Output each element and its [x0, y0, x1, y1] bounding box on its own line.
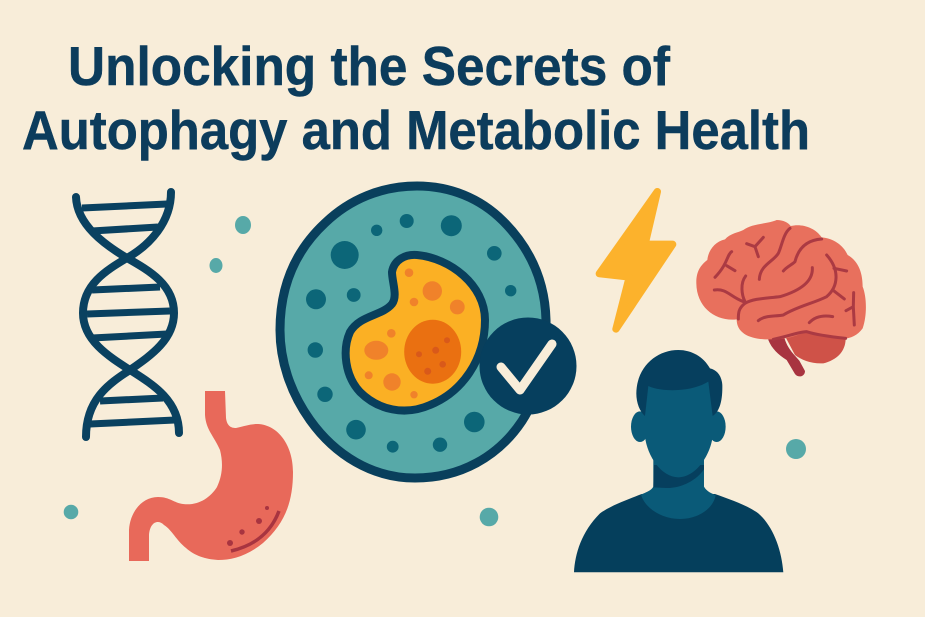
stomach inner curve and dots [227, 506, 279, 551]
ears [631, 411, 649, 442]
neck [641, 460, 716, 519]
icon: lightning bolt [599, 192, 673, 329]
nucleus blob [346, 255, 485, 411]
decorative teal dots [64, 216, 806, 526]
face [643, 380, 713, 477]
hair [636, 350, 722, 416]
brain folds [714, 228, 854, 339]
icon: DNA double helix [76, 192, 179, 437]
title: Unlocking the Secrets of [68, 35, 671, 97]
brain stem [768, 333, 805, 376]
neck shadow [653, 465, 704, 488]
icon: cell with nucleus [280, 186, 546, 478]
title: Autophagy and Metabolic Health [22, 99, 810, 161]
cerebrum [696, 220, 866, 339]
nucleolus [404, 320, 461, 384]
icon: person silhouette [574, 350, 783, 572]
nucleus spots [364, 268, 465, 398]
icon: brain [696, 220, 866, 376]
title [22, 35, 810, 161]
cell body [280, 186, 546, 478]
cerebellum [780, 327, 846, 363]
icon: stomach [129, 391, 293, 561]
shoulders [574, 494, 783, 572]
icon: check badge [480, 318, 576, 414]
cell organelles [306, 214, 516, 453]
